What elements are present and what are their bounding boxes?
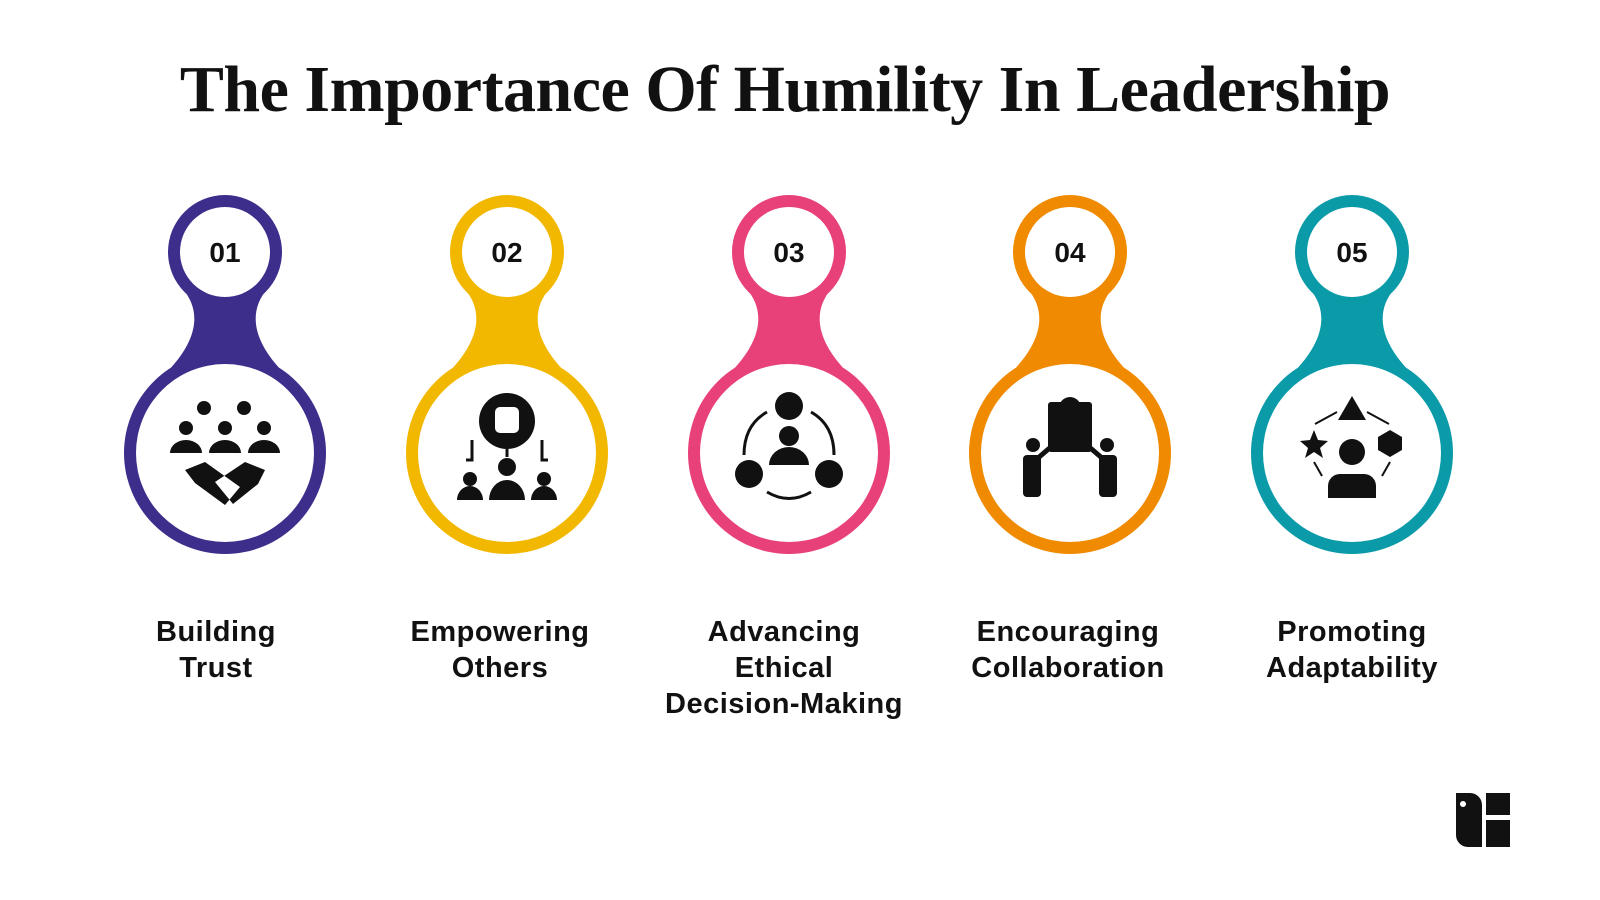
logo xyxy=(1456,793,1510,847)
icon: fist and people xyxy=(457,393,557,500)
label 05 xyxy=(1266,616,1438,684)
label 03: Advancing xyxy=(708,616,860,648)
title: The Importance Of Humility In Leadership xyxy=(180,53,1390,126)
step 04: 04 xyxy=(1054,237,1086,268)
label 04 xyxy=(971,616,1165,684)
step 01 xyxy=(124,195,326,554)
icon: collaboration puzzle xyxy=(1023,397,1117,497)
label 01 xyxy=(156,616,276,684)
icon: decision cycle xyxy=(735,392,843,498)
icon: adaptability shapes xyxy=(1300,396,1402,498)
label 03: Ethical xyxy=(735,652,833,684)
label 04: Collaboration xyxy=(971,652,1165,684)
step 02 xyxy=(406,195,608,554)
label 03: Decision-Making xyxy=(665,688,903,720)
step 03 xyxy=(688,195,890,554)
label 02 xyxy=(410,616,590,684)
label 02: Empowering xyxy=(410,616,590,648)
step 01: 01 xyxy=(209,237,241,268)
step 04 xyxy=(969,195,1171,554)
label 04: Encouraging xyxy=(977,616,1159,648)
label 05: Promoting xyxy=(1277,616,1427,648)
step 05: 05 xyxy=(1336,237,1368,268)
label 01: Building xyxy=(156,616,276,648)
step 02: 02 xyxy=(491,237,523,268)
label 01: Trust xyxy=(179,652,253,684)
step 05 xyxy=(1251,195,1453,554)
label 02: Others xyxy=(452,652,548,684)
label 03 xyxy=(665,616,903,720)
label 05: Adaptability xyxy=(1266,652,1438,684)
step 03: 03 xyxy=(773,237,805,268)
icon: team handshake xyxy=(170,401,280,505)
